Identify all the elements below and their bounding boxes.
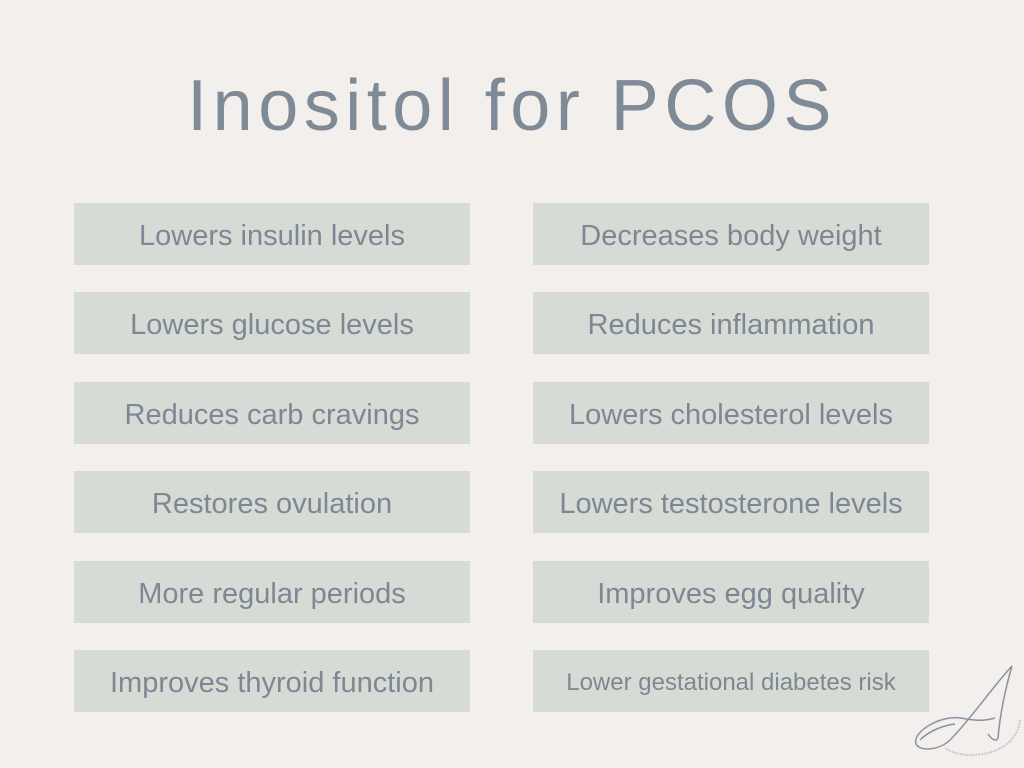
box: testosterone <box>533 471 929 533</box>
box: gestational diabetes: Lower gestational diabetes risk <box>566 669 896 696</box>
box: cholesterol: Lowers cholesterol levels <box>569 398 893 430</box>
box: lowers insulin <box>74 203 470 265</box>
box: cholesterol <box>533 382 929 444</box>
box: reduces inflammation: Reduces inflammation <box>588 308 874 340</box>
box: gestational diabetes <box>533 650 929 712</box>
title: Inositol for PCOS <box>187 66 837 146</box>
logo <box>914 666 1021 756</box>
box: reduces inflammation <box>533 292 929 354</box>
box: regular periods <box>74 561 470 623</box>
box: lowers insulin: Lowers insulin levels <box>139 220 405 252</box>
box: regular periods: More regular periods <box>138 578 406 610</box>
box: thyroid: Improves thyroid function <box>110 666 434 698</box>
box: carb cravings: Reduces carb cravings <box>124 398 419 430</box>
box: thyroid <box>74 650 470 712</box>
box: ovulation <box>74 471 470 533</box>
box: testosterone: Lowers testosterone levels <box>559 488 903 520</box>
box: lowers glucose <box>74 292 470 354</box>
box: lowers glucose: Lowers glucose levels <box>130 308 414 340</box>
box: decreases body weight: Decreases body weight <box>580 220 882 252</box>
box: decreases body weight <box>533 203 929 265</box>
box: egg quality <box>533 561 929 623</box>
box: ovulation: Restores ovulation <box>152 488 392 520</box>
box: carb cravings <box>74 382 470 444</box>
box: egg quality: Improves egg quality <box>597 578 865 610</box>
